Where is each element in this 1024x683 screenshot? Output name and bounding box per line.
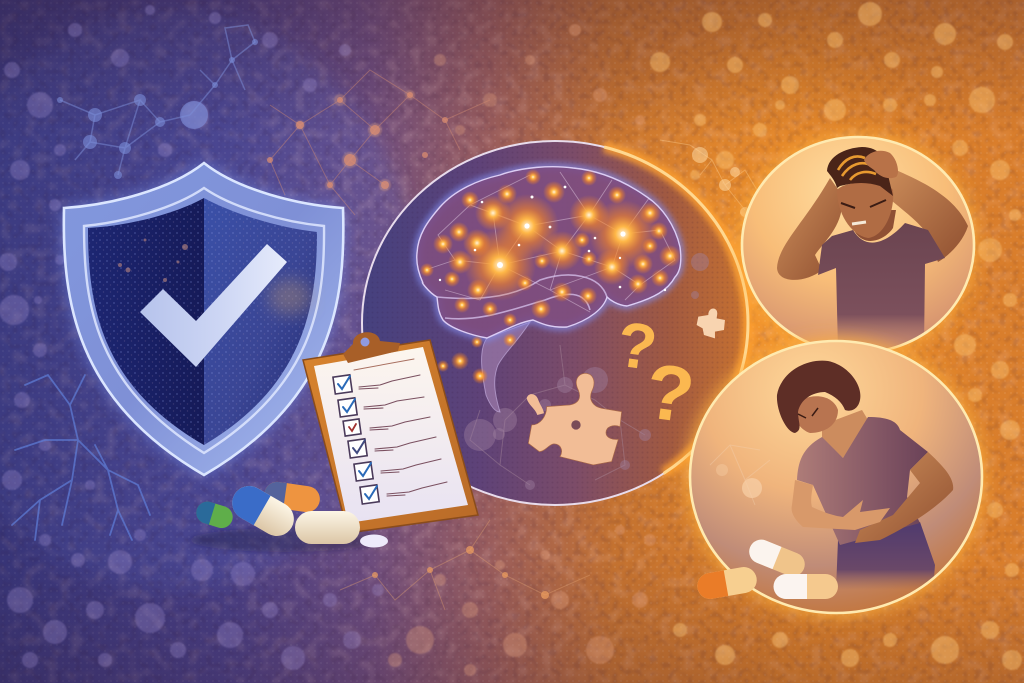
shield: speckle texture — [88, 198, 317, 445]
brain folds and neural links — [425, 172, 675, 319]
man: shirt — [818, 223, 945, 350]
bokeh particles: hot side — [650, 2, 1022, 670]
shield: speckles — [118, 238, 188, 282]
woman: pants — [836, 522, 935, 590]
pill: small round tablet — [360, 534, 388, 548]
pill: white and peach capsule tilted — [746, 536, 808, 580]
pill: orange and blue capsule — [262, 480, 322, 514]
puzzle piece — [527, 373, 622, 465]
question mark two: ? — [640, 346, 700, 440]
checklist row 1 — [333, 359, 420, 394]
panel: central brain circle — [362, 141, 748, 505]
shield: check mark — [140, 244, 287, 367]
clipboard — [303, 332, 478, 533]
pill: green capsule — [194, 499, 235, 531]
pill: blue and white capsule — [226, 480, 300, 542]
man: facial features — [841, 200, 886, 224]
checklist row 2 — [338, 397, 424, 417]
question mark one: ? — [612, 308, 661, 384]
panel: man with headache — [740, 135, 976, 355]
brain — [417, 167, 681, 412]
small puzzle piece — [697, 309, 725, 338]
man: hand on head — [864, 151, 898, 178]
checklist row 4 — [348, 437, 436, 458]
man: neck — [853, 210, 896, 241]
checklist row 3 — [343, 417, 430, 436]
shield: warm sheen — [268, 279, 312, 315]
woman: shirt — [797, 417, 928, 545]
shield: lighter right face — [204, 198, 317, 445]
pill: orange capsule — [695, 565, 759, 601]
woman: near arm — [855, 452, 953, 543]
white sparks — [439, 186, 666, 291]
molecule network: upper left — [57, 25, 258, 179]
checklist row 6 — [360, 482, 447, 504]
pill: large white tablet — [295, 511, 360, 544]
pill: white and peach capsule flat — [773, 574, 838, 599]
panel: shield — [64, 163, 343, 475]
checklist row 5 — [354, 459, 441, 481]
man: raised arm left — [777, 178, 842, 280]
clipboard clip — [343, 332, 400, 363]
faint molecules behind woman — [710, 445, 770, 505]
molecule network: upper centre — [267, 70, 490, 215]
molecule network: upper right — [660, 140, 760, 217]
panel: woman with stomach ache — [687, 338, 985, 616]
woman: far arm — [792, 480, 890, 530]
brain glow nodes — [420, 169, 681, 381]
woman: hair — [777, 361, 860, 433]
bokeh particles: warm middle — [295, 24, 656, 676]
molecule network inside circle — [464, 253, 709, 490]
bokeh particles: cool side — [0, 5, 384, 670]
woman: face — [798, 396, 838, 433]
man: face — [837, 182, 893, 238]
woman: closed eyes — [798, 408, 818, 418]
woman: neck and chest — [822, 410, 868, 458]
pill shadow — [190, 528, 380, 552]
neural sparks below brain — [437, 352, 488, 384]
molecule network: lower centre — [340, 520, 590, 610]
blood vessel tree: lower left — [12, 375, 150, 540]
shield: dark left face — [88, 198, 204, 445]
man: raised arm right — [888, 171, 968, 262]
man: hair — [827, 147, 893, 196]
